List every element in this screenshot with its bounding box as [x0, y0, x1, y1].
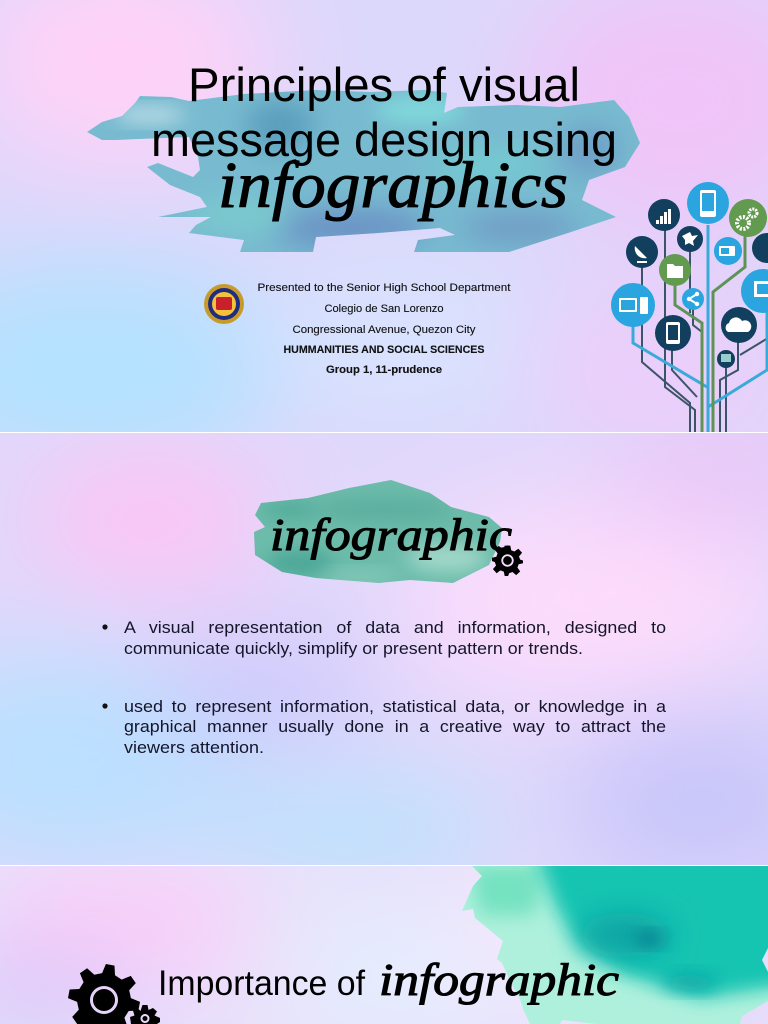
icon: gear	[492, 546, 523, 576]
heading: importance of infographic: infographic	[379, 955, 619, 1005]
presenter text: Congressional Avenue, Quezon City	[292, 324, 476, 336]
presenter text: HUMMANITIES AND SOCIAL SCIENCES	[284, 344, 484, 356]
icon tree	[611, 182, 768, 432]
bullet text 1: A visual representation of data and information, designed to	[124, 619, 666, 637]
presenter text: Colegio de San Lorenzo	[324, 303, 444, 315]
presenter text	[258, 282, 510, 376]
presenter text: Group 1, 11-prudence	[326, 364, 442, 376]
panel: title slide	[0, 0, 768, 480]
bullet text 1: communicate quickly, simplify or present pattern or trends.	[124, 640, 583, 658]
title: message design using	[151, 113, 617, 166]
panel: importance slide	[0, 850, 768, 1024]
bullet text 2: graphical manner usually done in a creative way to attract the	[124, 718, 666, 736]
watercolor splash	[462, 866, 768, 1024]
heading: importance of infographic	[161, 962, 620, 1005]
heading: importance of infographic: Importance of	[158, 964, 365, 1003]
icon: gears	[68, 964, 160, 1024]
title	[151, 58, 617, 222]
bullet text 2: used to represent information, statistical data, or knowledge in a	[124, 698, 667, 716]
bullet text 1	[102, 619, 666, 658]
bullet text 2	[102, 700, 666, 753]
icon: school seal	[204, 284, 244, 324]
panel: definition slide	[0, 433, 768, 865]
title: infographics	[218, 149, 568, 222]
watercolor splash	[87, 90, 640, 252]
bullet text 2: viewers attention.	[124, 739, 264, 757]
title: Principles of visual	[188, 58, 580, 111]
heading: infographic: infographic	[270, 509, 512, 560]
watercolor splash	[250, 478, 510, 586]
presenter text: Presented to the Senior High School Department	[258, 282, 510, 294]
